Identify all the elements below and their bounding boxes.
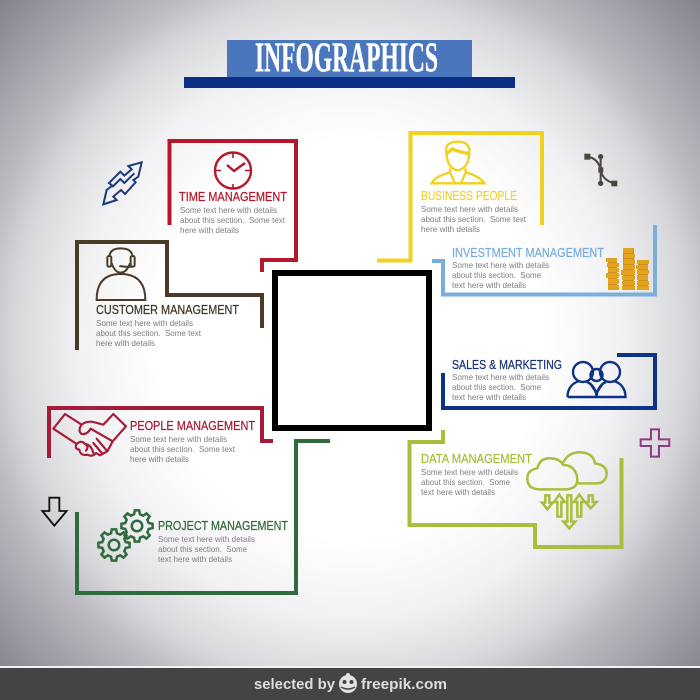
body text: here with details — [96, 338, 155, 348]
icon: clock — [215, 152, 251, 189]
title banner — [184, 36, 515, 88]
body text: here with details — [421, 224, 480, 234]
heading: DATA MANAGEMENT — [421, 451, 532, 466]
body text: text here with details — [452, 392, 526, 402]
icon: gears — [98, 510, 153, 561]
body text: about this section. Some text — [130, 444, 236, 454]
body text: text here with details — [421, 487, 495, 497]
body text: Some text here with details — [130, 434, 227, 444]
body text: Some text here with details — [452, 372, 549, 382]
body text — [452, 372, 549, 402]
body text: Some text here with details — [96, 318, 193, 328]
panel: people management — [49, 408, 273, 464]
body text: Some text here with details — [421, 204, 518, 214]
body text: Some text here with details — [180, 205, 277, 215]
body text — [96, 318, 202, 348]
central black square — [275, 273, 429, 428]
icon: headset agent — [97, 248, 145, 300]
heading: BUSINESS PEOPLE — [421, 188, 517, 203]
body text: about this section. Some — [452, 382, 541, 392]
body text: about this section. Some text — [96, 328, 202, 338]
heading: CUSTOMER MANAGEMENT — [96, 302, 239, 317]
body text: about this section. Some — [158, 544, 247, 554]
icon: business man — [432, 142, 484, 183]
body text — [130, 434, 236, 464]
body text: text here with details — [452, 280, 526, 290]
panel: data management — [410, 430, 622, 547]
body text: Some text here with details — [452, 260, 549, 270]
footer bar — [0, 666, 700, 700]
body text: Some text here with details — [158, 534, 255, 544]
body text: Some text here with details — [421, 467, 518, 477]
heading: SALES & MARKETING — [452, 357, 562, 372]
body text — [158, 534, 255, 564]
footer credit left: selected by — [254, 676, 336, 693]
body text: about this section. Some — [421, 477, 510, 487]
icon: clouds with arrows — [527, 452, 607, 528]
body text — [180, 205, 286, 235]
body text: text here with details — [158, 554, 232, 564]
icon: coin stacks — [606, 248, 649, 290]
icon: bezier curve — [584, 154, 617, 186]
panel: investment management — [432, 225, 655, 294]
footer credit right: freepik.com — [361, 676, 447, 693]
icon: freepik mascot — [339, 673, 357, 693]
panel: project management — [77, 441, 330, 593]
panel: time management — [170, 141, 296, 272]
icon: plus — [641, 429, 669, 457]
body text — [421, 204, 527, 234]
body text: about this section. Some — [452, 270, 541, 280]
panel: business people — [377, 133, 542, 260]
icon: handshake — [53, 414, 126, 456]
heading: TIME MANAGEMENT — [179, 189, 287, 204]
panel: customer management — [77, 242, 262, 350]
body text: about this section. Some text — [421, 214, 527, 224]
heading: PEOPLE MANAGEMENT — [130, 418, 255, 433]
icon: group of people — [568, 362, 626, 397]
body text: here with details — [180, 225, 239, 235]
heading: PROJECT MANAGEMENT — [158, 518, 288, 533]
body text: about this section. Some text — [180, 215, 286, 225]
icon: zigzag double arrows — [103, 162, 142, 204]
title text: INFOGRAPHICS — [255, 36, 438, 82]
panel: sales and marketing — [443, 355, 655, 408]
icon: outlined down arrow — [42, 498, 67, 526]
body text — [421, 467, 518, 497]
heading: INVESTMENT MANAGEMENT — [452, 245, 604, 260]
body text: here with details — [130, 454, 189, 464]
body text — [452, 260, 549, 290]
